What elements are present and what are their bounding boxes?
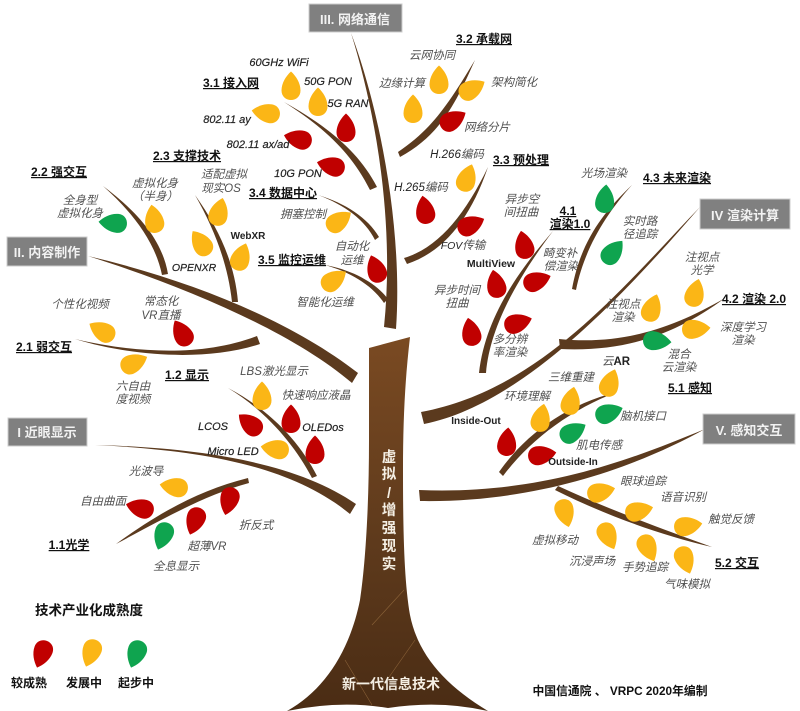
item: 注视点渲染 xyxy=(606,291,666,324)
item: 自动化运维: 自动化 xyxy=(335,240,371,253)
item: 三维重建 xyxy=(548,371,595,417)
item: 适配虚拟现实OS: 现实OS xyxy=(201,182,241,195)
item: 个性化视频: 个性化视频 xyxy=(51,298,111,311)
heading 3.5: 3.5 监控运维 xyxy=(258,252,326,267)
item: 60GHz WiFi: 60GHz WiFi xyxy=(249,57,309,69)
item: 沉浸声场: 沉浸声场 xyxy=(569,555,616,568)
heading 3.4: 3.4 数据中心 xyxy=(249,185,317,200)
item: 超薄VR xyxy=(181,505,226,553)
group: 5.2 交互 xyxy=(532,475,759,591)
item: 多分辨率渲染: 多分辨 xyxy=(493,333,529,346)
group: 3.3 预处理 xyxy=(394,148,549,264)
item: 智能化运维: 智能化运维 xyxy=(296,296,355,309)
legend xyxy=(11,602,154,690)
item: 常态化VR直播: 常态化 xyxy=(144,295,180,308)
item: 虚拟化身（半身）: （半身） xyxy=(132,190,178,203)
legend: 较成熟 xyxy=(11,638,56,690)
heading 4.2: 4.2 渲染 2.0 xyxy=(722,291,786,306)
trunk title: 拟 xyxy=(382,466,397,483)
item: 云网协同 xyxy=(409,49,456,94)
item: 全身型虚拟化身 xyxy=(57,194,128,234)
item: LBS激光显示 xyxy=(240,365,309,410)
item: 网络分片 xyxy=(436,105,511,135)
item: 六自由度视频 xyxy=(116,348,153,406)
label: V 感知交互 xyxy=(703,414,795,444)
item: 架构简化 xyxy=(455,74,538,104)
legend: 起步中: 起步中 xyxy=(118,675,154,690)
heading 4.1: 4.1 xyxy=(560,204,577,218)
item: WebXR: WebXR xyxy=(231,231,266,242)
label: V 感知交互: V. 感知交互 xyxy=(716,423,782,438)
item: 注视点渲染: 注视点 xyxy=(606,298,642,311)
item: 边缘计算 xyxy=(379,77,427,123)
branch 1.2 xyxy=(228,388,317,478)
item: 深度学习渲染: 深度学习 xyxy=(720,321,767,334)
item: H.266编码: H.266编码 xyxy=(430,148,485,161)
item: Inside-Out xyxy=(451,416,518,457)
item: Inside-Out: Inside-Out xyxy=(451,416,501,427)
group: 1.2 显示 xyxy=(165,365,351,478)
branch 3.3 xyxy=(404,167,488,264)
item: 50G PON xyxy=(304,76,352,116)
item: 实时路径追踪 xyxy=(597,215,659,269)
item: OLEDos: OLEDos xyxy=(302,422,344,434)
main branch II xyxy=(88,256,358,383)
item: 多分辨率渲染 xyxy=(493,309,535,359)
item: 自由曲面: 自由曲面 xyxy=(80,495,128,508)
item: 云网协同: 云网协同 xyxy=(409,49,456,62)
item: 光波导: 光波导 xyxy=(129,465,165,478)
legend: 起步中 xyxy=(118,638,154,690)
trunk title: / xyxy=(387,486,391,502)
item: 自由曲面 xyxy=(80,495,156,521)
item: 实时路径追踪: 径追踪 xyxy=(623,228,659,241)
branch 3.2 xyxy=(398,60,475,157)
trunk base caption: 新一代信息技术 xyxy=(342,676,440,692)
item: 深度学习渲染: 渲染 xyxy=(732,334,756,347)
item: 快速响应液晶 xyxy=(282,389,351,433)
item: LCOS xyxy=(198,407,267,440)
heading 5.1: 5.1 感知 xyxy=(668,380,712,395)
item: 畸变补偿渲染: 畸变补 xyxy=(543,247,579,260)
item: 自动化运维: 运维 xyxy=(340,254,365,267)
item: 10G PON xyxy=(274,153,347,180)
item: 三维重建: 三维重建 xyxy=(548,371,595,384)
branch 3.4 xyxy=(318,195,379,240)
label: II 内容制作: II. 内容制作 xyxy=(14,245,80,260)
item: 语音识别 xyxy=(623,491,707,524)
heading 1.1: 1.1光学 xyxy=(49,537,89,552)
item: H.266编码 xyxy=(430,148,485,194)
group: 2.2 强交互 xyxy=(31,164,179,275)
item: 混合云渲染: 云渲染 xyxy=(662,361,698,374)
heading 1.2: 1.2 显示 xyxy=(165,368,209,382)
group: 3.2 承载网 xyxy=(379,31,538,157)
item: 环境理解: 环境理解 xyxy=(504,390,551,403)
item: 5G RAN: 5G RAN xyxy=(328,98,369,110)
item: 六自由度视频: 度视频 xyxy=(116,393,153,406)
trunk title: 现 xyxy=(382,539,397,555)
item: 注视点光学: 光学 xyxy=(690,264,715,277)
heading 3.1: 3.1 接入网 xyxy=(203,75,259,90)
item: 肌电传感 xyxy=(556,417,624,452)
item: 拥塞控制: 拥塞控制 xyxy=(280,208,328,221)
branch 5.1 xyxy=(499,392,617,476)
item: 混合云渲染 xyxy=(642,330,698,374)
item: 触觉反馈 xyxy=(673,513,755,538)
item: 5G RAN xyxy=(328,98,369,142)
branch 2.2 xyxy=(103,186,168,275)
item: 超薄VR: 超薄VR xyxy=(188,540,226,553)
heading 3.2: 3.2 承载网 xyxy=(456,31,512,46)
label: II 内容制作 xyxy=(7,237,87,266)
item: 802.11 ax/ad: 802.11 ax/ad xyxy=(227,139,290,151)
item: 网络分片: 网络分片 xyxy=(464,121,511,134)
item: Outside-In: Outside-In xyxy=(548,457,598,468)
item: 注视点渲染: 渲染 xyxy=(612,311,636,324)
item: 802.11 ay xyxy=(203,101,281,126)
trunk title: 强 xyxy=(382,521,397,537)
item: 异步时间扭曲 xyxy=(434,284,483,348)
branch 2.3 xyxy=(195,195,238,302)
item: 手势追踪 xyxy=(622,531,669,574)
item: H.265编码: H.265编码 xyxy=(394,181,449,194)
heading 3.3: 3.3 预处理 xyxy=(493,152,549,167)
item: Micro LED xyxy=(207,437,290,461)
label: I 近眼显示 xyxy=(8,418,87,446)
item: 异步空间扭曲: 异步空 xyxy=(505,193,541,206)
group: 1.1 光学 xyxy=(49,465,275,573)
main branch I xyxy=(95,445,356,514)
item: 个性化视频 xyxy=(51,298,119,346)
item: H.265编码 xyxy=(394,181,449,225)
main branch V xyxy=(419,429,705,501)
item: 异步时间扭曲: 异步时间 xyxy=(434,284,481,297)
branch 4.1 xyxy=(479,231,553,373)
item: 全身型虚拟化身: 虚拟化身 xyxy=(57,207,104,220)
item: 环境理解 xyxy=(504,390,553,434)
item: OLEDos xyxy=(302,422,344,464)
item: 眼球追踪 xyxy=(585,475,667,505)
item: OPENXR: OPENXR xyxy=(172,262,217,274)
source credit: 中国信通院 、 VRPC 2020年编制 xyxy=(532,684,708,698)
item: OPENXR xyxy=(172,226,217,274)
branch 1.1 xyxy=(116,478,249,544)
item: 适配虚拟现实OS xyxy=(201,168,248,228)
heading 4.3: 4.3 未来渲染 xyxy=(643,170,711,185)
item: 手势追踪: 手势追踪 xyxy=(622,561,669,574)
label: IV 渲染计算 xyxy=(700,199,790,229)
legend: 发展中 xyxy=(66,637,105,690)
item: 架构简化: 架构简化 xyxy=(491,76,538,89)
group: 3.1 接入网 xyxy=(203,57,377,190)
branch 3.5 xyxy=(325,265,388,303)
item: 异步时间扭曲: 扭曲 xyxy=(446,297,470,310)
heading 2.2: 2.2 强交互 xyxy=(31,164,87,179)
item: 气味模拟 xyxy=(664,544,711,591)
item: 光场渲染: 光场渲染 xyxy=(581,167,628,180)
item: 注视点光学 xyxy=(682,251,721,309)
group: 2.1 弱交互 xyxy=(16,295,260,406)
branch 4.3 xyxy=(572,185,632,290)
item: 沉浸声场 xyxy=(569,519,623,568)
item: 畸变补偿渲染 xyxy=(521,247,580,295)
group: 4.3 未来渲染 xyxy=(572,167,711,290)
label: III 网络通信 xyxy=(309,4,402,32)
item: 适配虚拟现实OS: 适配虚拟 xyxy=(201,168,248,181)
item: 异步空间扭曲 xyxy=(504,193,541,261)
item: 边缘计算: 边缘计算 xyxy=(379,77,427,90)
main branch IV xyxy=(421,207,700,424)
branch 5.2 xyxy=(555,486,712,547)
item: 虚拟移动 xyxy=(532,497,579,547)
group: 4.2 渲染 2.0 xyxy=(559,251,786,374)
item: 虚拟化身（半身）: 虚拟化身 xyxy=(132,177,179,190)
item: MultiView: MultiView xyxy=(467,258,516,270)
item: 云AR xyxy=(596,356,631,399)
item: 全息显示 xyxy=(149,520,200,573)
item: 触觉反馈: 触觉反馈 xyxy=(708,513,755,526)
item: 802.11 ax/ad xyxy=(227,126,314,152)
item: 虚拟移动: 虚拟移动 xyxy=(532,534,579,547)
item: 自动化运维 xyxy=(335,240,390,285)
item: 实时路径追踪: 实时路 xyxy=(623,215,659,228)
label: I 近眼显示: I 近眼显示 xyxy=(17,425,77,440)
heading 2.3: 2.3 支撑技术 xyxy=(153,148,221,163)
item: 快速响应液晶: 快速响应液晶 xyxy=(282,389,351,402)
item: WebXR xyxy=(227,231,266,273)
group: 3.4 数据中心 xyxy=(249,185,379,240)
group: 4.1 渲染1.0 xyxy=(434,193,591,373)
item: 云AR: 云AR xyxy=(602,356,631,368)
branch 4.2 xyxy=(559,298,725,349)
branch 3.1 xyxy=(284,102,377,190)
item: 气味模拟: 气味模拟 xyxy=(664,578,711,591)
item: 全息显示: 全息显示 xyxy=(153,560,200,573)
item: 802.11 ay: 802.11 ay xyxy=(203,114,252,126)
group: 2.3 支撑技术 xyxy=(153,148,266,302)
group: 3.5 监控运维 xyxy=(258,240,390,309)
main branch III xyxy=(351,33,397,329)
heading 5.2: 5.2 交互 xyxy=(715,555,759,570)
trunk title: 增 xyxy=(382,501,396,519)
item: Micro LED: Micro LED xyxy=(207,446,259,458)
item: LBS激光显示: LBS激光显示 xyxy=(240,365,309,378)
heading 4.1: 渲染1.0 xyxy=(550,216,591,231)
item: 折反式 xyxy=(216,485,275,532)
item: FOV传输: FOV传输 xyxy=(441,239,487,252)
legend: 较成熟: 较成熟 xyxy=(11,675,47,690)
item: 肌电传感: 肌电传感 xyxy=(576,439,624,452)
item: 脑机接口 xyxy=(593,399,667,427)
label: III 网络通信: III. 网络通信 xyxy=(320,12,390,27)
item: 眼球追踪: 眼球追踪 xyxy=(620,475,667,488)
item: 折反式: 折反式 xyxy=(239,519,275,532)
item: 脑机接口: 脑机接口 xyxy=(620,410,667,423)
trunk title: 虚 xyxy=(382,448,396,466)
legend title: 技术产业化成熟度 xyxy=(35,602,143,618)
item: 全身型虚拟化身: 全身型 xyxy=(63,194,99,207)
item: 常态化VR直播 xyxy=(142,295,197,350)
legend: 发展中: 发展中 xyxy=(66,675,102,690)
item: 畸变补偿渲染: 偿渲染 xyxy=(544,260,580,273)
item: 异步空间扭曲: 间扭曲 xyxy=(504,206,540,219)
item: 光波导 xyxy=(129,465,189,499)
item: 60GHz WiFi xyxy=(249,57,309,100)
item: FOV传输 xyxy=(441,210,488,252)
item: 语音识别: 语音识别 xyxy=(660,491,707,504)
item: LCOS: LCOS xyxy=(198,421,229,433)
item: 六自由度视频: 六自由 xyxy=(116,380,152,393)
item: 深度学习渲染 xyxy=(681,318,767,347)
item: 50G PON: 50G PON xyxy=(304,76,352,88)
item: 多分辨率渲染: 率渲染 xyxy=(493,346,529,359)
item: Outside-In xyxy=(527,443,598,468)
label: IV 渲染计算: IV 渲染计算 xyxy=(711,208,779,223)
trunk title: 实 xyxy=(382,555,396,573)
item: 虚拟化身（半身） xyxy=(132,177,179,234)
item: 混合云渲染: 混合 xyxy=(668,348,692,361)
item: MultiView xyxy=(467,258,516,300)
item: 注视点光学: 注视点 xyxy=(685,251,721,264)
item: 10G PON: 10G PON xyxy=(274,168,322,180)
tree trunk xyxy=(287,337,488,711)
group: 5.1 感知 xyxy=(451,356,712,476)
heading 2.1: 2.1 弱交互 xyxy=(16,339,72,354)
item: 常态化VR直播: VR直播 xyxy=(142,309,182,322)
branch 2.1 xyxy=(75,336,260,355)
